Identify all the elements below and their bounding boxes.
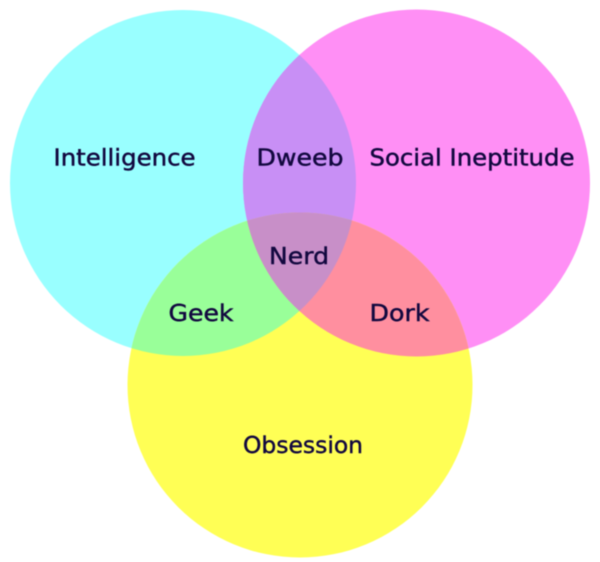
label: dork: Dork	[370, 299, 430, 327]
overlap: nerd	[247, 212, 352, 311]
circle: obsession	[128, 212, 472, 558]
overlap: dork	[299, 220, 469, 358]
label: dweeb: Dweeb	[256, 144, 344, 172]
circle: social ineptitude	[243, 10, 590, 356]
circle: intelligence	[10, 10, 356, 356]
label: geek: Geek	[168, 299, 234, 327]
overlap: dweeb	[242, 55, 356, 221]
label: intelligence: Intelligence	[54, 144, 196, 172]
label: social ineptitude: Social Ineptitude	[370, 144, 574, 172]
label: nerd: Nerd	[269, 242, 329, 270]
label: obsession: Obsession	[243, 431, 363, 459]
overlap: geek	[131, 220, 300, 356]
